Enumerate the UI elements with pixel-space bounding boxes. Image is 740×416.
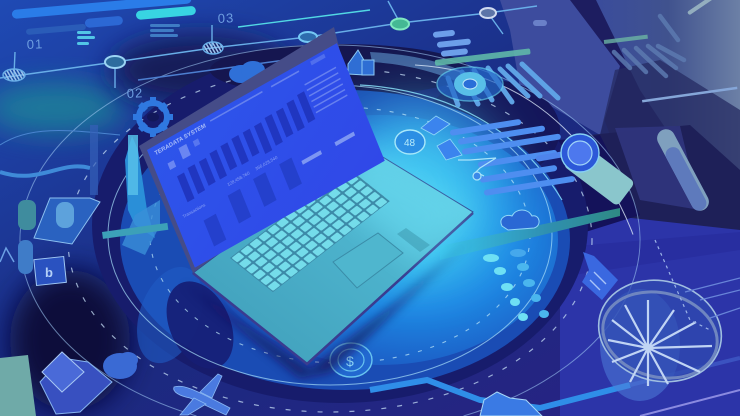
screen labels: 128,458,760 (227, 170, 251, 187)
rings (20, 45, 640, 416)
laptop (139, 27, 473, 378)
icon: gear (133, 97, 173, 137)
teal band (440, 208, 620, 260)
icon: shopping bag (34, 256, 66, 285)
trackpad (333, 233, 403, 288)
left panel: chart and wave (0, 125, 120, 274)
laptop shadow (182, 240, 470, 378)
top left pills (12, 0, 196, 45)
icon: chat robot bottom (480, 392, 542, 416)
screen list (304, 67, 348, 113)
right lower lines (640, 240, 740, 416)
icon: cloud behind screen (229, 61, 265, 83)
icon: robot device (437, 67, 503, 101)
laptop base (193, 145, 473, 363)
icon: airplane (174, 374, 230, 415)
node: striped 01 (3, 69, 25, 81)
pills top centre right (433, 20, 547, 57)
screen labels (180, 154, 281, 219)
palm rest mark (397, 228, 430, 252)
icon: magnifier (535, 134, 599, 172)
icon: building (348, 50, 374, 75)
icon: tablet (34, 198, 100, 244)
icon: cloud (501, 210, 539, 230)
timeline with nodes (0, 1, 537, 88)
bottom left corner patch (0, 355, 36, 416)
screen bars row two (199, 158, 306, 247)
node: pale (480, 8, 496, 18)
screen tabs (209, 54, 326, 122)
node: green (391, 18, 409, 30)
icon: shopping cart (458, 158, 496, 180)
icon: shield 48: 48 (404, 138, 416, 149)
screen labels: Transactions (182, 202, 207, 219)
label 03: 03 (217, 10, 235, 26)
laptop screen (147, 43, 385, 268)
bottom band line (370, 358, 740, 408)
icon: cups and pencils (102, 135, 168, 255)
decorative rings backdrop (92, 44, 588, 403)
screen small tiles (164, 137, 203, 170)
label 02: 02 (126, 85, 144, 101)
icon: envelope (421, 116, 462, 160)
node: ring (105, 56, 125, 68)
bright corner on deck (345, 145, 473, 262)
icon: dollar coin: $ (346, 353, 354, 369)
icon: cloud bottom left (103, 352, 138, 379)
dots cluster (483, 249, 549, 321)
screen buttons (301, 150, 322, 165)
node: ring behind screen (299, 32, 317, 42)
icon: shield 48 (395, 130, 425, 154)
label 01: 01 (26, 36, 44, 52)
horizontal pills (450, 119, 575, 196)
laptop front edge (193, 213, 473, 364)
bar chart: slanted bars right (614, 16, 684, 76)
bar chart: slanted bars upper right (448, 64, 558, 105)
teal divider bars (435, 0, 737, 102)
labels 01 02 03 (26, 10, 235, 101)
laptop lid frame (139, 27, 363, 273)
panel: upper right angled slabs (420, 0, 740, 416)
screen bars row one (172, 91, 319, 202)
panel: glowing data disc (120, 52, 570, 390)
icon: dollar coin (330, 343, 372, 377)
screen title: TERADATA SYSTEM (154, 123, 207, 157)
keyboard (230, 167, 390, 292)
icon: shopping bag: b (45, 265, 53, 280)
node: striped 03 (203, 42, 223, 54)
screen labels: 356,028,540 (255, 154, 279, 172)
icon: cards (40, 352, 112, 414)
icon: globe (588, 267, 732, 401)
icon: right side large pills (563, 126, 712, 214)
icon: speech bubble document (582, 252, 618, 300)
